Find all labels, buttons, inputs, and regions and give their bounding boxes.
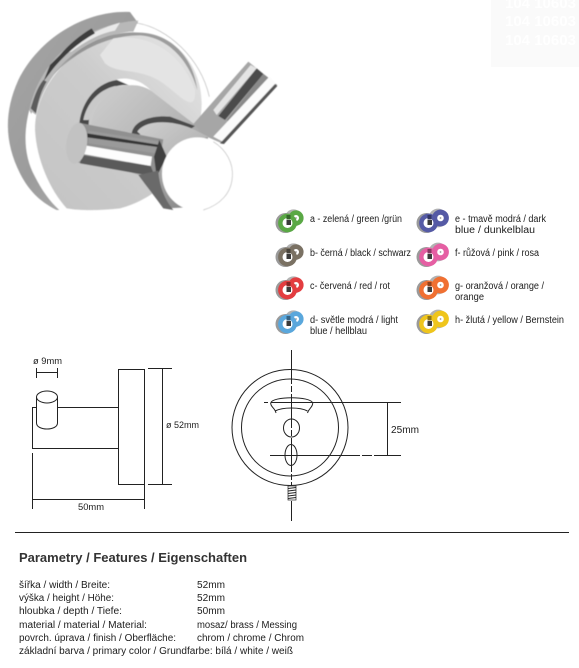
- features table: 50mm: [197, 606, 225, 617]
- features table: základní barva / primary color / Grundfarbe: bílá / white / weiß: [19, 646, 293, 657]
- watermark panel: faint product code: [491, 0, 579, 67]
- heading: features: Parametry / Features / Eigenschaften: [19, 550, 247, 565]
- swatch d: light blue: [276, 310, 398, 337]
- watermark panel: faint product code: 104 10603: [505, 13, 576, 30]
- dimension: 9 mm peg diameter: ø 9mm: [33, 356, 62, 366]
- front peg: [64, 121, 167, 177]
- features table: povrch. úprava / finish / Oberfläche:: [19, 633, 176, 644]
- dimension: 52 mm plate diameter: ø 52mm: [166, 420, 199, 430]
- dark underside of stem: [138, 171, 173, 210]
- swatch g: orange: orange: [455, 292, 484, 303]
- dimension: 50 mm depth: 50mm: [78, 502, 104, 512]
- swatch c: red: [276, 276, 390, 300]
- features table: výška / height / Höhe:: [19, 593, 114, 604]
- front plate: [35, 32, 202, 210]
- end cap of hook: [162, 137, 233, 211]
- front view technical drawing: [232, 350, 419, 521]
- swatch a: green: a - zelená / green /grün: [310, 214, 402, 225]
- features table: mosaz/ brass / Messing: [197, 620, 297, 631]
- swatch d: light blue: d- světle modrá / light: [310, 315, 398, 326]
- screw: [288, 486, 296, 500]
- stem collar dark ring: [79, 80, 128, 128]
- swatch e: dark blue: [416, 209, 547, 236]
- dark bevel band: [29, 21, 138, 115]
- swatch f: pink: f- růžová / pink / rosa: [455, 247, 539, 259]
- stem body: [83, 85, 208, 208]
- features table: 52mm: [197, 593, 225, 604]
- features table: 52mm: [197, 580, 225, 591]
- upper peg: [193, 62, 277, 144]
- divider rule: [15, 532, 569, 533]
- swatch d: light blue: blue / hellblau: [310, 326, 367, 337]
- features table: [19, 580, 304, 657]
- colour options legend: [276, 209, 564, 337]
- collar behind cap: [132, 116, 208, 177]
- swatch f: pink: [416, 243, 539, 267]
- swatch e: dark blue: blue / dunkelblau: [455, 225, 535, 236]
- swatch b: black: b- černá / black / schwarz: [310, 248, 411, 259]
- watermark panel: faint product code: 104 10603: [505, 32, 576, 49]
- dimension: 25 mm hole spacing: 25mm: [391, 425, 419, 436]
- dimension: 50 mm depth: [32, 453, 144, 512]
- product photo: chrome double hook: [8, 12, 277, 211]
- features table: material / material / Material:: [19, 620, 147, 631]
- stem hole highlight: [117, 79, 159, 103]
- features table: šířka / width / Breite:: [19, 580, 110, 591]
- side view technical drawing: [32, 356, 199, 512]
- white rim highlight: [26, 110, 72, 210]
- dimension: 25 mm hole spacing: [264, 402, 419, 456]
- back disc: [8, 12, 138, 210]
- swatch h: yellow: [416, 310, 564, 334]
- swatch h: yellow: h- žlutá / yellow / Bernstein: [455, 315, 564, 326]
- swatch g: orange: g- oranžová / orange /: [455, 281, 544, 292]
- dimension: 52 mm plate diameter: [148, 368, 199, 484]
- swatch g: orange: [416, 276, 544, 303]
- swatch c: red: c- červená / red / rot: [310, 281, 390, 292]
- dimension: 9 mm peg diameter: [33, 356, 62, 378]
- features table: hloubka / depth / Tiefe:: [19, 606, 122, 617]
- features table: chrom / chrome / Chrom: [197, 633, 304, 644]
- swatch b: black: [276, 243, 411, 267]
- swatch a: green: [276, 209, 402, 233]
- swatch e: dark blue: e - tmavě modrá / dark: [455, 214, 547, 225]
